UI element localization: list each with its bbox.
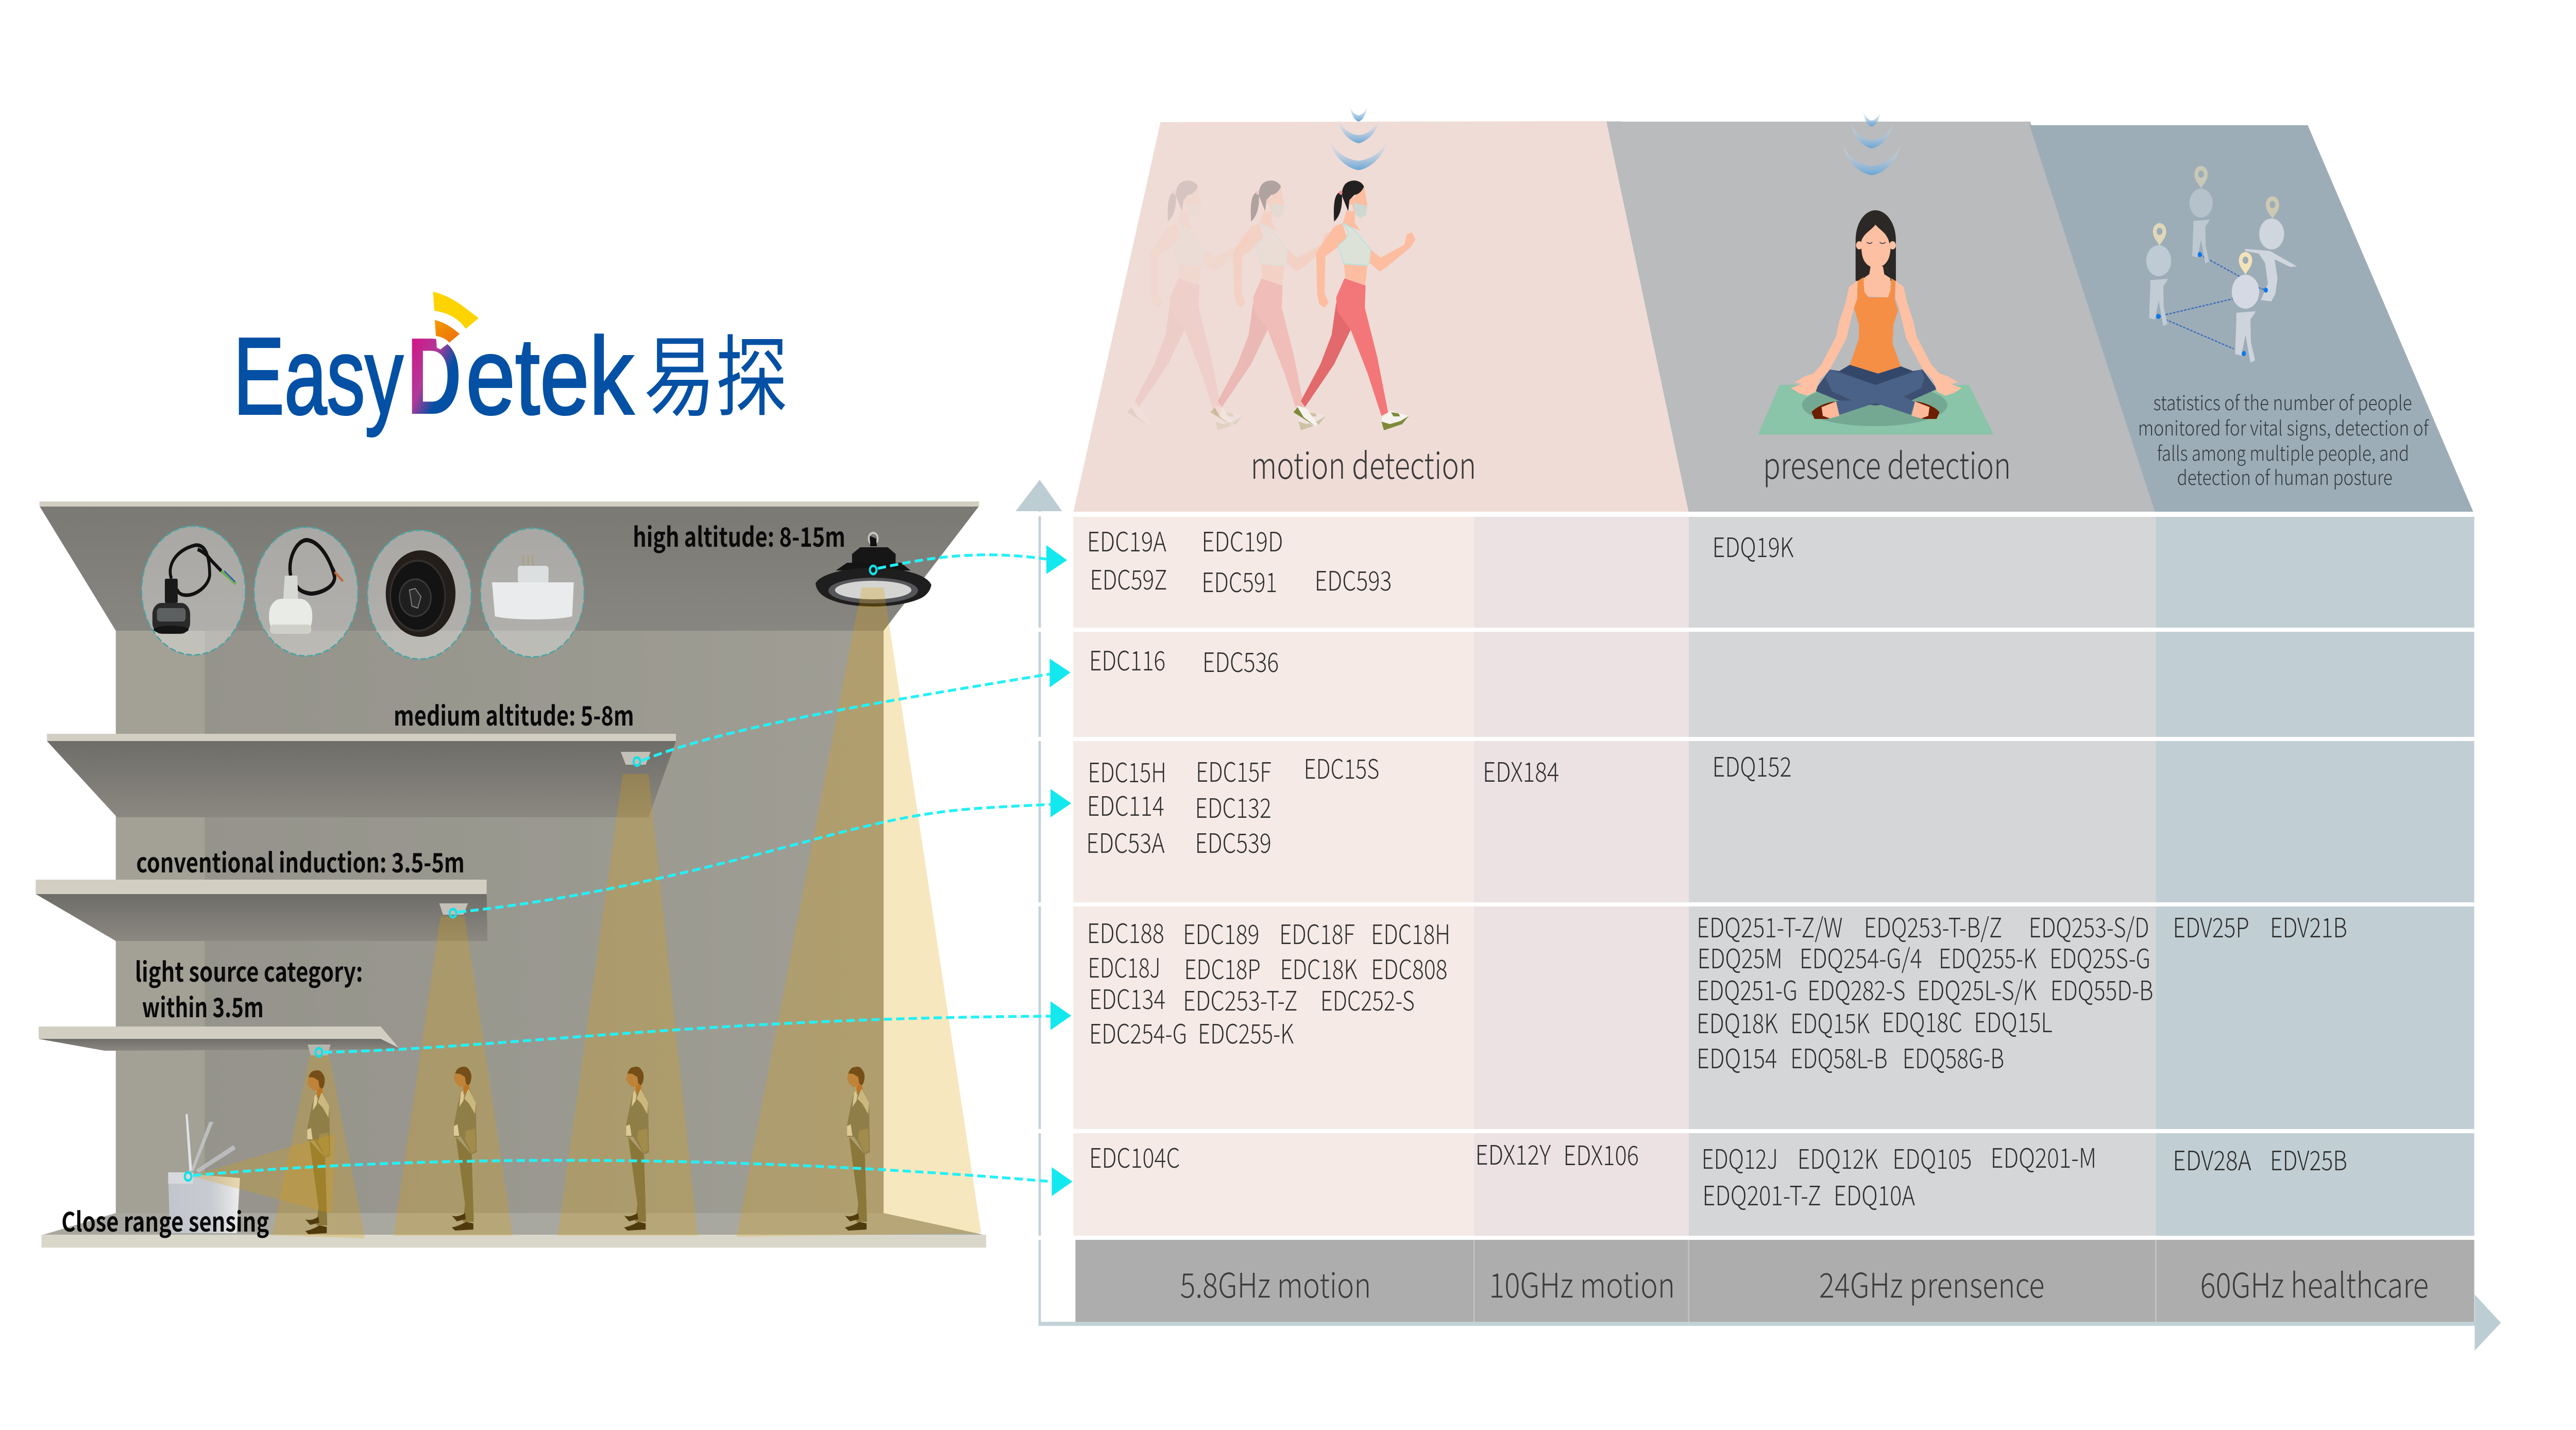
sensor: conventional xyxy=(439,903,468,915)
logo wordmark: etek xyxy=(466,315,634,437)
ghost runner near xyxy=(1210,180,1332,430)
row: high altitude models xyxy=(1087,520,1794,600)
footer band xyxy=(1075,1240,2475,1322)
column: 60GHz xyxy=(2156,517,2475,1238)
row: light source models: EDC18K xyxy=(1280,948,1358,987)
row: light source models: EDQ15K xyxy=(1790,1002,1870,1041)
row: conventional induction models xyxy=(1086,745,1792,861)
row: light source models: EDQ254-G/4 xyxy=(1800,937,1922,976)
detection beam: toilet xyxy=(191,1134,335,1214)
ceiling xyxy=(40,506,979,631)
tracker dots xyxy=(2156,252,2268,356)
arrow: conventional to row 3 xyxy=(450,789,1071,917)
row: conventional induction models: EDQ152 xyxy=(1713,745,1792,784)
footer band: 60GHz healthcare xyxy=(2200,1258,2429,1308)
shelf: conventional induction xyxy=(36,894,487,941)
radar waves xyxy=(1330,103,1387,170)
row: medium altitude models: EDC536 xyxy=(1202,641,1279,680)
radar waves xyxy=(1843,108,1901,175)
row: light source models: EDC808 xyxy=(1371,948,1447,987)
product photos xyxy=(142,526,584,659)
arrow: high altitude to row 1 xyxy=(870,545,1067,574)
row: light source models: EDQ282-S xyxy=(1807,969,1905,1008)
row: light source models: EDQ253-S/D xyxy=(2029,906,2149,945)
label: light source category: within 3.5m xyxy=(142,986,264,1025)
row: conventional induction models: EDC15H xyxy=(1088,751,1166,790)
row: light source models: EDC18F xyxy=(1279,913,1355,952)
person 2 xyxy=(452,1067,477,1231)
row: conventional induction models: EDC132 xyxy=(1195,786,1272,826)
header panel: motion detection xyxy=(1073,103,1689,512)
column: 10GHz xyxy=(1474,517,1689,1238)
column: 24GHz xyxy=(1689,517,2156,1238)
row: light source models: EDV21B xyxy=(2270,906,2347,945)
footer band: 5.8GHz motion xyxy=(1180,1258,1371,1308)
row: light source models: EDQ18C xyxy=(1882,1001,1962,1040)
row: light source models xyxy=(1087,906,2347,1076)
arrow: light source to row 4 xyxy=(316,1001,1071,1056)
row: high altitude models: EDC19D xyxy=(1201,520,1283,559)
label: light source category: light source category: xyxy=(135,950,363,989)
logo wordmark: Easy xyxy=(233,315,403,437)
label: light source category xyxy=(135,950,363,1025)
description: statistics of the number of people xyxy=(2154,388,2412,416)
ghost runner far xyxy=(1127,180,1249,430)
row: light source models: EDQ15L xyxy=(1974,1001,2053,1040)
row: light source models: EDC18H xyxy=(1371,913,1450,952)
row: conventional induction models: EDC15F xyxy=(1196,750,1272,789)
row: close range models xyxy=(1089,1133,2347,1213)
detection beam: medium altitude xyxy=(557,774,698,1236)
heading: presence detection xyxy=(1763,438,2011,490)
row separators xyxy=(1034,512,2477,1240)
row: close range models: EDQ12K xyxy=(1798,1137,1878,1176)
column: 5.8GHz xyxy=(1073,517,1474,1238)
logo: EasyDetek 易探 xyxy=(233,292,788,437)
row: conventional induction models: EDC53A xyxy=(1086,821,1165,861)
row: medium altitude models xyxy=(1089,639,1279,680)
row: light source models: EDQ55D-B xyxy=(2050,969,2154,1008)
figure 1 xyxy=(2190,166,2213,263)
back wall xyxy=(116,631,884,1214)
row: light source models: EDQ58G-B xyxy=(1903,1037,2004,1076)
logo wordmark xyxy=(233,315,634,437)
row: light source models: EDC252-S xyxy=(1320,979,1415,1018)
person 4 xyxy=(845,1067,870,1231)
figure 4 xyxy=(2232,252,2259,363)
row: light source models: EDQ154 xyxy=(1697,1037,1777,1076)
floor xyxy=(42,1213,986,1235)
row: light source models: EDC255-K xyxy=(1198,1012,1294,1051)
sensor: light source xyxy=(308,1045,331,1055)
row: close range models: EDQ105 xyxy=(1892,1137,1972,1176)
row: light source models: EDQ25L-S/K xyxy=(1917,969,2037,1008)
row: high altitude models: EDC593 xyxy=(1315,559,1392,598)
logo Chinese name: 易探 xyxy=(643,306,788,434)
scene: building cross-section xyxy=(36,501,986,1248)
person 1 xyxy=(305,1070,330,1234)
row: light source models: EDC254-G xyxy=(1089,1012,1187,1051)
vertical axis with up arrow xyxy=(1015,480,1062,1325)
row: light source models: EDC253-T-Z xyxy=(1183,979,1298,1018)
arrow: medium altitude to row 2 xyxy=(634,659,1071,766)
description: falls among multiple people, and xyxy=(2157,438,2409,467)
row: light source models: EDQ253-T-B/Z xyxy=(1864,906,2002,945)
shelf: medium altitude xyxy=(47,741,676,817)
row: light source models: EDC18J xyxy=(1088,946,1161,985)
meditating woman xyxy=(1758,210,1993,434)
row: light source models: EDC188 xyxy=(1087,912,1164,951)
row: high altitude models: EDC59Z xyxy=(1090,558,1167,597)
detection beam: high altitude xyxy=(737,587,981,1237)
row: conventional induction models: EDC114 xyxy=(1087,784,1164,823)
person 3 xyxy=(624,1067,649,1231)
row: light source models: EDQ251-T-Z/W xyxy=(1697,906,1843,945)
heading: motion detection xyxy=(1250,438,1476,490)
label: close range sensing: Close range sensing xyxy=(61,1200,269,1239)
detection beam: light source xyxy=(272,1055,365,1238)
row: light source models: EDQ251-G xyxy=(1697,969,1798,1008)
row: light source models: EDQ25S-G xyxy=(2049,937,2150,976)
row: conventional induction models: EDC15S xyxy=(1304,747,1379,786)
row: light source models: EDC134 xyxy=(1089,978,1165,1017)
product 4: white cap module xyxy=(480,528,584,657)
label: medium altitude: medium altitude: 5-8m xyxy=(394,694,634,733)
runner xyxy=(1293,180,1415,430)
row: light source models: EDC189 xyxy=(1183,913,1259,952)
arrow: close range to row 5 xyxy=(185,1160,1073,1196)
description xyxy=(2138,388,2429,491)
row: close range models: EDQ12J xyxy=(1702,1137,1778,1176)
figure 3 xyxy=(2146,223,2171,326)
sensor: medium altitude xyxy=(621,752,651,765)
logo signal arcs xyxy=(433,292,479,349)
row: close range models: EDQ201-M xyxy=(1991,1136,2096,1175)
row: close range models: EDV28A xyxy=(2173,1139,2251,1178)
row: light source models: EDQ255-K xyxy=(1939,937,2037,976)
logo wordmark: D xyxy=(407,315,462,437)
sensor: high bay lamp xyxy=(816,533,931,607)
description: monitored for vital signs, detection of xyxy=(2138,413,2429,442)
horizontal axis with right arrow xyxy=(1039,1294,2501,1351)
label: conventional induction: conventional induction: 3.5-5m xyxy=(136,841,465,880)
row: close range models: EDC104C xyxy=(1089,1136,1180,1175)
header panel: healthcare xyxy=(2029,125,2473,512)
label: high altitude: high altitude: 8-15m xyxy=(633,515,845,554)
description: detection of human posture xyxy=(2177,462,2393,491)
row: light source models: EDV25P xyxy=(2173,906,2249,945)
row: close range models: EDX106 xyxy=(1563,1134,1639,1173)
row: light source models: EDQ25M xyxy=(1698,937,1783,976)
footer band: 10GHz motion xyxy=(1489,1258,1675,1308)
footer band: 24GHz prensence xyxy=(1819,1258,2044,1308)
connecting lines xyxy=(2158,255,2266,349)
row: conventional induction models: EDX184 xyxy=(1483,750,1559,789)
product 3: black disc module xyxy=(367,530,471,659)
chart axes xyxy=(1015,480,2501,1351)
row: light source models: EDQ18K xyxy=(1697,1002,1778,1041)
row: high altitude models: EDC19A xyxy=(1087,520,1166,559)
detection beam: conventional xyxy=(394,916,513,1236)
row: light source models: EDQ58L-B xyxy=(1790,1037,1888,1076)
table: product matrix xyxy=(1034,512,2477,1322)
product 2: white bulb sensor xyxy=(254,527,358,656)
shelf: within 3.5m xyxy=(39,1039,401,1051)
product 1: sensor with cable xyxy=(142,526,245,655)
header panel: presence detection xyxy=(1606,108,2155,512)
row: medium altitude models: EDC116 xyxy=(1089,639,1165,678)
row: close range models: EDX12Y xyxy=(1475,1133,1551,1172)
person figures with location pins xyxy=(2146,166,2297,363)
row: light source models: EDC18P xyxy=(1184,948,1261,987)
left wall column xyxy=(116,631,205,1214)
figure 2 xyxy=(2245,196,2297,301)
row: high altitude models: EDQ19K xyxy=(1713,526,1794,565)
row: high altitude models: EDC591 xyxy=(1201,561,1277,600)
row: close range models: EDQ10A xyxy=(1834,1174,1915,1213)
smart toilet xyxy=(168,1114,240,1233)
row: conventional induction models: EDC539 xyxy=(1195,821,1272,861)
row: close range models: EDQ201-T-Z xyxy=(1702,1174,1821,1213)
row: close range models: EDV25B xyxy=(2270,1139,2347,1178)
